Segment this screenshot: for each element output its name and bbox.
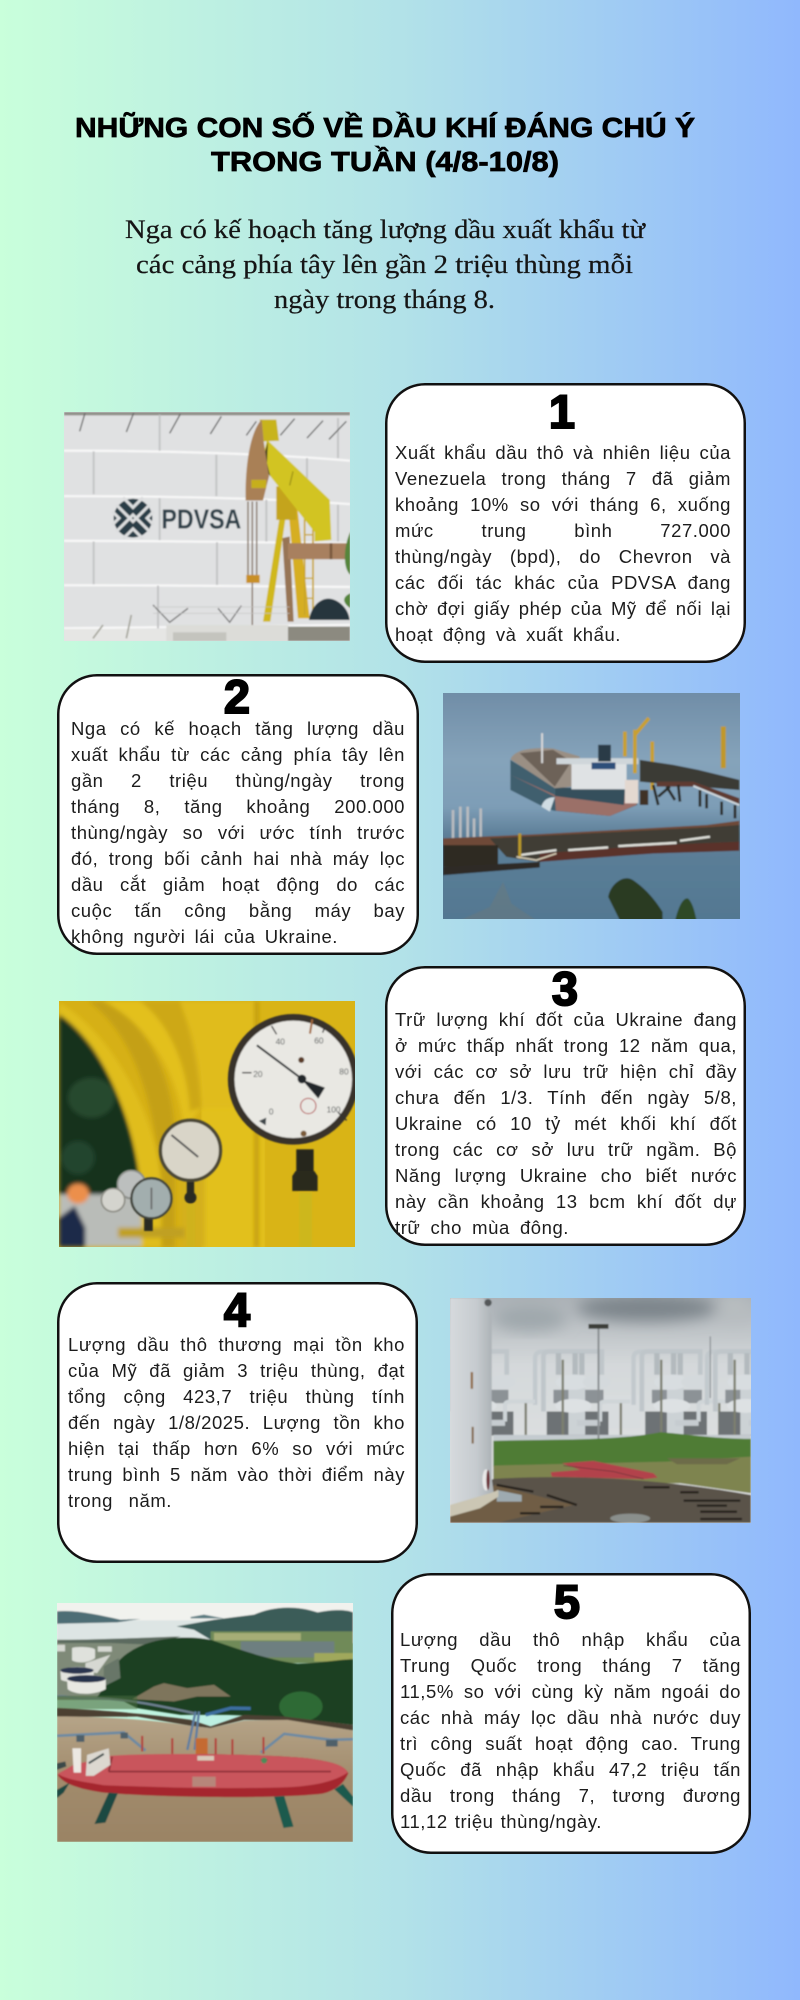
text 3 <box>395 1009 737 1238</box>
number 2: 2 <box>224 670 250 723</box>
background forest <box>59 1001 258 1248</box>
text 4: Lượng dầu thô thương mại tồn kho <box>68 1334 405 1355</box>
text 4: trung bình 5 năm vào thời điểm này <box>68 1464 405 1485</box>
photo: crude tanker in Chinese port <box>57 1603 353 1842</box>
text 3: Ukraine có 10 tỷ mét khối khí đốt <box>395 1113 737 1134</box>
text 3: chưa đến 1/3. Tính đến ngày 5/8, <box>395 1087 737 1108</box>
main gauge <box>296 1149 314 1173</box>
tank <box>450 1298 494 1505</box>
loading arms <box>453 807 481 842</box>
small gauges <box>117 1170 145 1198</box>
text 4: trong năm. <box>68 1490 172 1511</box>
hill <box>97 1638 353 1725</box>
walkways <box>187 1711 199 1750</box>
text 3: này cần khoảng 13 bcm khí đốt dự <box>395 1191 737 1212</box>
red pipes <box>551 1461 658 1479</box>
text 1: hoạt động và xuất khẩu. <box>395 624 621 645</box>
text 1: các đối tác khác của PDVSA đang <box>395 572 731 593</box>
photo: pressure gauges on yellow pipes: 100 <box>327 1105 341 1115</box>
text 2 <box>71 718 405 947</box>
text 1: thùng/ngày (bpd), do Chevron và <box>395 546 731 567</box>
panel 4: USA <box>57 1282 418 1563</box>
text 2: thùng/ngày so với ước tính trước <box>71 822 405 843</box>
text 5: Trung Quốc trong tháng 7 tăng <box>400 1655 741 1676</box>
text 4: của Mỹ đã giảm 3 triệu thùng, đạt <box>68 1360 405 1381</box>
water <box>57 1716 353 1842</box>
number 1: 1 <box>549 385 575 438</box>
text 5: các nhà máy lọc dầu nhà nước duy <box>400 1707 741 1728</box>
ship <box>58 1754 348 1797</box>
right pier <box>640 760 739 790</box>
text 3: ở mức thấp nhất trong 12 năm qua, <box>395 1035 737 1056</box>
subtitle: ngày trong tháng 8. <box>274 285 495 314</box>
text 5: trì công suất hoạt động cao. Trung <box>400 1733 741 1754</box>
photo: pressure gauges on yellow pipes: 60 <box>314 1035 324 1045</box>
text 5: Lượng dầu thô nhập khẩu của <box>400 1629 741 1650</box>
photo: oil storage plant <box>450 1298 751 1523</box>
text 3: trong các cơ sở lưu trữ ngầm. Bộ <box>395 1139 737 1160</box>
photo: tanker at terminal <box>443 693 740 919</box>
medium gauge <box>187 1181 194 1198</box>
number 4: 4 <box>224 1283 250 1336</box>
fence <box>153 605 241 622</box>
photo: PDVSA oil pump: PDVSA <box>161 503 242 535</box>
text 5: 11,5% so với cùng kỳ năm ngoái do <box>400 1681 741 1702</box>
photo: pressure gauges on yellow pipes <box>59 1001 355 1247</box>
text 3: Năng lượng Ukraine cho biết nước <box>395 1165 737 1186</box>
title: TRONG TUẦN (4/8-10/8) <box>211 146 559 177</box>
text 3: trữ cho mùa đông. <box>395 1217 569 1238</box>
text 5: dầu trong tháng 7, tương đương <box>400 1785 741 1806</box>
photo: pressure gauges on yellow pipes: 0 <box>269 1106 274 1116</box>
shore <box>57 1708 353 1731</box>
panel 5: China <box>391 1573 751 1854</box>
text 1: chờ đợi giấy phép của Mỹ để nối lại <box>395 598 731 619</box>
photo: pressure gauges on yellow pipes: 40 <box>276 1037 285 1047</box>
text 1 <box>395 442 731 645</box>
text 1: Xuất khẩu dầu thô và nhiên liệu của <box>395 442 731 463</box>
text 4: hiện tại thấp hơn 6% so với mức <box>68 1438 405 1459</box>
text 2: gần 2 triệu thùng/ngày trong <box>71 770 405 791</box>
text 2: không người lái của Ukraine. <box>71 926 338 947</box>
tanks <box>72 1647 95 1662</box>
text 5 <box>400 1629 741 1832</box>
panel 1: Venezuela <box>385 383 746 663</box>
text 1: mức trung bình 727.000 <box>395 520 731 541</box>
text 5: Quốc đã nhập khẩu 47,2 triệu tấn <box>400 1759 741 1780</box>
pavement <box>450 1477 751 1523</box>
number 3: 3 <box>552 962 578 1015</box>
cranes <box>625 718 652 790</box>
text 4: đến ngày 1/8/2025. Lượng tồn kho <box>68 1412 405 1433</box>
PDVSA logo <box>114 499 152 538</box>
panel 3: Ukraine <box>385 966 746 1246</box>
lower jetty <box>443 821 739 847</box>
title: NHỮNG CON SỐ VỀ DẦU KHÍ ĐÁNG CHÚ Ý <box>75 111 695 143</box>
photo: PDVSA oil pump <box>64 412 350 641</box>
trees <box>608 878 663 920</box>
number 5: 5 <box>554 1575 580 1628</box>
ship <box>510 760 638 816</box>
text 2: xuất khẩu từ các cảng phía tây lên <box>71 744 405 765</box>
photo: pressure gauges on yellow pipes: 20 <box>253 1069 263 1079</box>
text 2: dầu cắt giảm hoạt động do các <box>71 874 405 895</box>
grass <box>493 1432 751 1468</box>
pump <box>263 508 287 622</box>
text 1: Venezuela trong tháng 7 đã giảm <box>395 468 731 489</box>
subtitle: Nga có kế hoạch tăng lượng dầu xuất khẩu từ <box>125 215 646 244</box>
subtitle <box>125 215 646 314</box>
subtitle: các cảng phía tây lên gần 2 triệu thùng mỗi <box>136 250 633 279</box>
text 2: đó, trong bối cảnh hai nhà máy lọc <box>71 848 405 869</box>
panel 2: Russia <box>57 674 419 955</box>
text 2: cuộc tấn công bằng máy bay <box>71 900 405 921</box>
text 5: 11,12 triệu thùng/ngày. <box>400 1811 602 1832</box>
text 4 <box>68 1334 405 1511</box>
text 2: Nga có kế hoạch tăng lượng dầu <box>71 718 405 739</box>
tugs <box>94 1793 118 1824</box>
text 2: tháng 8, tăng khoảng 200.000 <box>71 796 405 817</box>
text 3: với các cơ sở lưu trữ hiện chỉ đầy <box>395 1061 737 1082</box>
text 3: Trữ lượng khí đốt của Ukraine đang <box>395 1009 737 1030</box>
text 1: khoảng 10% so với tháng 6, xuống <box>395 494 731 515</box>
photo: pressure gauges on yellow pipes: 80 <box>339 1066 349 1076</box>
text 4: tổng cộng 423,7 triệu thùng tính <box>68 1386 405 1407</box>
title <box>75 111 696 178</box>
